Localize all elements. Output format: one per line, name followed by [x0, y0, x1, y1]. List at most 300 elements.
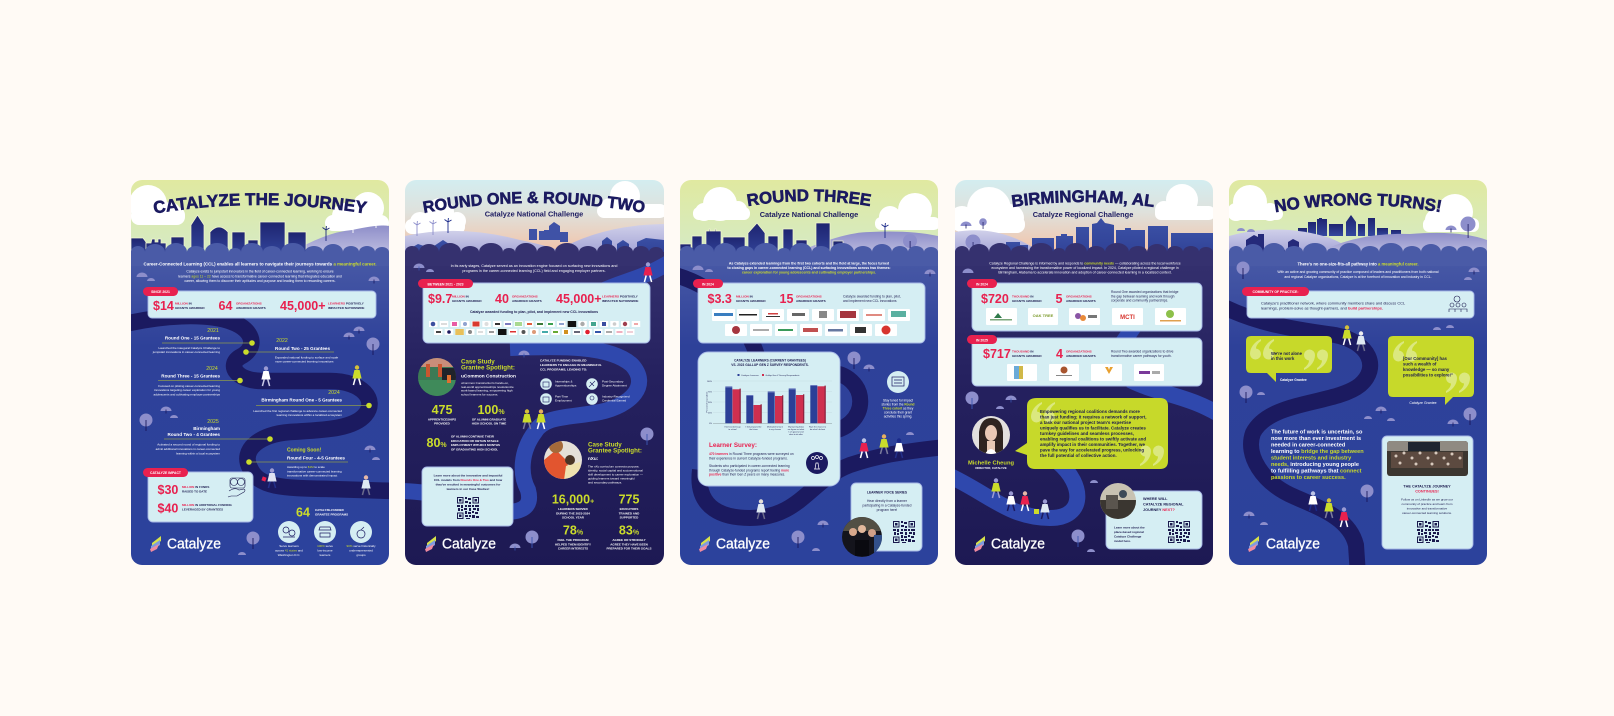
stats card: GRANTS AWARDED: [452, 299, 482, 303]
intro text: career, allowing them to discover their aptitudes and purpose and leading them to rewarding careers.: [184, 279, 336, 283]
stats card: ORGANIZATIONS: [512, 294, 538, 298]
stat icons: [278, 521, 372, 543]
stats card: and implement new CCL innovations: [843, 299, 897, 303]
logo: Catalyze: [716, 536, 770, 552]
learner survey text: positive than their Gen Z peers on many measures.: [709, 472, 785, 476]
case study 1 stats: EDUCATION OR OBTAIN STABLE: [451, 439, 499, 443]
logo: Catalyze: [1266, 536, 1320, 552]
title: NO WRONG TURNS!: [1274, 193, 1442, 212]
case study 1 photo: [418, 358, 456, 396]
case study 1 text: real-world apprenticeships revolutionize: [461, 385, 514, 389]
timeline 2025: learning within a local ecosystem: [176, 452, 220, 456]
impact card: MILLION IN FUNDS: [182, 485, 209, 489]
case study 1 stats: [426, 403, 506, 452]
2024 card: the gap between learning and work through: [1111, 294, 1175, 298]
subtitle: Catalyze National Challenge: [760, 210, 858, 219]
impact stories note: conclude their grant: [884, 410, 912, 414]
community of practice card: Catalyze's practitioner network, where community members share and discuss CCL: [1261, 300, 1406, 306]
intro text: [989, 262, 1181, 274]
impact card: $30: [158, 483, 178, 497]
bubble: our community: such a wealth of: [1403, 362, 1437, 366]
hills and turbines: [306, 226, 389, 252]
2024 card: $720: [981, 292, 1009, 306]
next card: JOURNEY NEXT?: [1143, 508, 1175, 512]
grantee stat: [296, 508, 348, 516]
case study 2 text: guiding learners toward meaningful: [588, 476, 635, 480]
next card: model here.: [1114, 539, 1131, 543]
bar chart: I am good at and: [788, 430, 804, 434]
timeline 2022: 2022: [276, 338, 288, 344]
title: ROUND THREE: [746, 189, 872, 206]
2024 card: IN 2024: [976, 282, 988, 286]
case study 2 text: Case Study: [588, 442, 622, 448]
case study 2 stats: PREPARED FOR THEIR GOALS: [607, 546, 651, 550]
stats card: AWARDED GRANTS: [512, 299, 542, 303]
grantee caption: Catalyze Grantee: [1409, 401, 1437, 405]
stats card: LEARNERS POSITIVELY: [328, 302, 364, 306]
case studies card: CCL models from Rounds One & Two and how: [434, 478, 503, 482]
stat captions: [275, 545, 376, 556]
bar chart: Percent of respondents: [706, 392, 708, 412]
stats card: MILLION IN: [452, 294, 469, 298]
community of practice card: learnings, problem-solve as thought-partners, and build partnerships.: [1261, 306, 1383, 310]
chart legend: Gallup Gen Z Survey Respondents: [766, 374, 800, 377]
figures on the road: [261, 365, 371, 495]
quote bubble: amplify impact in their communities. Together, we: [1040, 442, 1145, 447]
trees: [136, 272, 380, 555]
timeline coming soon: innovations with demonstrated impact: [287, 474, 337, 478]
continues card: [1382, 436, 1473, 549]
stats card: 45,000+: [556, 292, 602, 306]
quote bubble: pave the way for accelerated progress, unlocking: [1040, 448, 1144, 452]
bar chart: to school: [728, 428, 737, 431]
timeline 2024 Birmingham: 2024: [328, 390, 340, 396]
learner survey text: through Catalyze-funded programs report feeling more: [709, 468, 789, 472]
bar chart: the future: [749, 428, 759, 431]
group photo: [1387, 441, 1468, 476]
2025 card: Round Two awarded organizations to drive: [1111, 350, 1174, 354]
impact card: MILLION IN ADDITIONAL FUNDING: [182, 503, 232, 507]
case study 1 text: [461, 358, 516, 396]
bar chart: [706, 381, 832, 436]
trees: [414, 264, 654, 550]
grantee stat: 64: [296, 506, 310, 520]
next card: WHERE WILL: [1143, 497, 1168, 501]
learner voice card: LEARNER VOICE SERIES: [867, 490, 908, 494]
timeline 2024 Birmingham: Launched the first regional challenge to advance career-connected: [253, 409, 342, 413]
intro text: Career-Connected Learning (CCL) enables all learners to navigate their journeys towards a meaningful career.: [144, 262, 376, 266]
case study 2 stats: 83%: [619, 524, 640, 538]
turbines: [414, 218, 452, 236]
timeline 2022: Round Two - 25 Grantees: [275, 346, 330, 351]
timeline 2021: 2021: [207, 328, 219, 334]
intro text: There's no one-size-fits-all pathway into a meaningful career.: [1297, 262, 1419, 266]
outcomes list: Employment: [555, 398, 572, 402]
bar chart: Motivated to learn: [767, 426, 783, 428]
main statement: The future of work is uncertain, so: [1271, 430, 1363, 436]
case study 1 stats: 80%: [426, 436, 447, 450]
case study 2 stats: SCHOOL YEAR: [562, 516, 585, 520]
figures: [522, 409, 546, 429]
bubble: not alone: [1246, 336, 1332, 382]
bar chart: 100%: [707, 381, 712, 383]
outcomes list: LEARNERS TO ENGAGE IN MEANINGFUL: [540, 363, 602, 367]
case study 2 stats: SUPPORTED: [620, 516, 639, 520]
bar chart: in my classes: [769, 429, 781, 431]
intro text: [451, 264, 617, 273]
outcomes list: Internships &: [555, 380, 573, 384]
next card: Learn more about the: [1114, 526, 1145, 530]
case study 1 stats: EMPLOYMENT WITHIN 6 MONTHS: [451, 443, 500, 447]
bar chart: 25%: [708, 412, 712, 414]
chart card: [698, 352, 840, 486]
timeline coming soon: transformative career-connected learning: [287, 469, 342, 473]
intro text: ecosystem and harnessing the transformative power of localized impact. In 2024, Catalyze piloted a regional challenge in: [991, 266, 1179, 270]
learner survey text: 470 learners in Round Three programs were surveyed on: [709, 452, 794, 456]
outcomes list: Credential Earned: [602, 398, 627, 402]
stats card: BETWEEN 2021 - 2023: [428, 282, 464, 286]
intro text: Birmingham, Alabama to accelerate innovation and adoption of career-connected learning in a localized context.: [998, 270, 1172, 274]
case studies card: [422, 467, 513, 526]
skyline: [131, 214, 306, 252]
timeline 2025: Round Two - 4 Grantees: [168, 432, 220, 437]
learner survey text: [709, 442, 794, 476]
quote bubble: than just funding; it requires a network of support,: [1040, 414, 1146, 420]
case study 2 photo: [544, 439, 582, 480]
stats card: AWARDED GRANTS: [236, 306, 266, 310]
portrait caption: DIRECTOR, CATALYZE: [975, 466, 1007, 470]
bar chart: I feel excited to go: [724, 426, 742, 428]
bar chart: what to do after: [789, 433, 803, 436]
main statement: passions to career success.: [1271, 475, 1346, 481]
timeline 2022: more career-connected learning innovations: [275, 360, 334, 364]
case study 2 text: identity, social capital and socioemotional: [588, 468, 643, 472]
timeline 2021: Round One - 15 Grantees: [165, 336, 220, 340]
panel: Birmingham, AL: [955, 180, 1213, 565]
bar chart: 0%: [709, 423, 712, 425]
grantee logos: OAK TREE: [1033, 313, 1054, 318]
intro text: programs in the career-connected learning (CCL) field and engaging employer partners.: [462, 269, 606, 273]
impact card: $40: [158, 502, 178, 516]
timeline 2025: [156, 419, 273, 456]
body: [680, 252, 938, 566]
outcomes list: CCL PROGRAMS, LEADING TO:: [540, 368, 587, 372]
grantee stat: GRANTEE PROGRAMS: [315, 512, 348, 516]
continues card: THE CATALYZE JOURNEY: [1403, 484, 1451, 488]
case studies card: learners in our Case Studies!: [447, 487, 489, 491]
stats card: [693, 279, 925, 343]
clouds: [949, 184, 1215, 233]
stats card: GRANTS AWARDED: [736, 299, 766, 303]
case studies card: they've resulted in meaningful outcomes for: [436, 482, 501, 486]
case study 1 stats: APPRENTICESHIPS: [428, 418, 456, 422]
learner voice card: Hear directly from a learner: [867, 499, 908, 503]
intro text: With an active and growing community of practice composed of leaders and practitioners from both national: [1277, 270, 1439, 274]
next card: Catalyze Challenge: [1114, 534, 1142, 538]
intro text: learners ages 11 – 22 have access to transformative career-connected learning that integrates education and: [178, 274, 342, 278]
hills: [1229, 229, 1487, 260]
case study 2 stats: AGREE THEY HAVE BEEN: [610, 542, 648, 546]
body: [405, 252, 664, 566]
intro text: [727, 262, 891, 274]
grantee logos: [986, 308, 1186, 325]
trees: [962, 268, 1098, 552]
case study 2 text: and secondary pathways.: [588, 480, 622, 484]
main statement: now more than ever investment is: [1271, 436, 1361, 442]
stat captions: across 41 states and: [275, 548, 303, 552]
impact stories note: Stay tuned for impact: [883, 398, 913, 402]
photo: [1100, 483, 1136, 519]
grantee caption: Catalyze Grantee: [1280, 378, 1307, 382]
clouds: [693, 187, 940, 230]
2024 card: ORGANIZATIONS: [1066, 294, 1092, 298]
clouds: [129, 185, 389, 231]
skyline: [997, 218, 1213, 258]
stats card: 45,000+: [280, 299, 326, 313]
case study 1 stats: OF GRADUATING HIGH SCHOOL: [451, 448, 498, 452]
learner survey text: Learner Survey:: [709, 442, 757, 449]
main statement: learning to bridge the gap between: [1271, 449, 1364, 455]
case study 2 stats: FEEL THE PROGRAM: [558, 538, 589, 542]
portrait: [972, 416, 1010, 454]
bubble: not alone: in this work: [1271, 356, 1295, 361]
impact stories note: Three cohort as they: [883, 406, 914, 410]
stats card: ORGANIZATIONS: [236, 302, 262, 306]
community of practice card: COMMUNITY OF PRACTICE:: [1253, 290, 1298, 294]
outcomes list: Post-Secondary: [602, 380, 624, 384]
impact stories note: activities this spring.: [884, 414, 912, 418]
skyline: [680, 223, 843, 260]
bubble: our community: knowledge — so many: [1403, 367, 1450, 372]
case study 2 stats: TRAINED AND: [619, 511, 640, 515]
road: [125, 316, 395, 491]
next card: [1106, 491, 1202, 549]
timeline 2024 round three: 2024: [206, 366, 218, 372]
timeline coming soon: [246, 448, 348, 478]
figures: [1342, 325, 1366, 351]
title: ROUND ONE & ROUND TWO: [422, 192, 645, 213]
stats card: $3.3: [708, 292, 732, 306]
stat captions: underrepresented: [349, 548, 373, 552]
main statement: to fulfilling pathways that connect: [1271, 468, 1362, 474]
stats card: 40: [495, 292, 509, 306]
case study 1 text: uCommon Construction's hands-on,: [461, 381, 509, 385]
stats card: AWARDED GRANTS: [796, 299, 826, 303]
2025 card: GRANTS AWARDED: [1012, 354, 1042, 358]
impact card: CATALYZE IMPACT: [150, 471, 182, 475]
community of practice card: [1242, 287, 1474, 318]
bubble: our community: [1388, 336, 1474, 405]
icon: community: [1449, 296, 1467, 312]
quote bubble: turnkey guidelines and seamless processes,: [1040, 431, 1134, 436]
stats card: [143, 287, 376, 318]
timeline 2022: Expanded national funding to surface and scale: [275, 356, 339, 360]
case study 2 text: skill development to career exploration —: [588, 472, 643, 476]
case study 1 text: Case Study: [461, 358, 495, 366]
stat captions: learners: [320, 553, 331, 557]
timeline 2024 round three: innovations targeting career exploration for young: [154, 388, 220, 392]
timeline 2025: 2025: [207, 419, 219, 425]
intro text: career exploration for young adolescents and cultivating employer partnerships.: [742, 270, 876, 274]
continues card: career-connected learning solutions.: [1402, 511, 1452, 515]
hills and turbines: [785, 211, 938, 260]
stats card: GRANTS AWARDED: [175, 306, 205, 310]
panel: Round One and Round Two: [405, 180, 664, 565]
case studies card: Learn more about the innovative and impactful: [434, 474, 503, 478]
portrait caption: Michelle Cheung: [968, 460, 1014, 466]
quote bubble: uniquely qualifies us to facilitate. Catalyze creates: [1040, 426, 1146, 430]
far skyline: [529, 222, 568, 242]
2025 card: THOUSAND IN: [1012, 350, 1033, 354]
continues card: community of practice and learn from: [1402, 502, 1453, 506]
bar chart: I feel prepared for: [746, 426, 762, 428]
outcomes list: Industry-Recognized: [602, 394, 630, 398]
timeline 2024 round three: Focused on piloting career-connected learning: [158, 384, 220, 388]
road: [400, 262, 670, 512]
impact card: LEVERAGED BY GRANTEES: [182, 508, 223, 512]
timeline 2024 round three: Round Three - 15 Grantees: [161, 374, 220, 378]
timeline 2024 Birmingham: learning innovations within a localized ecosystem: [277, 413, 342, 417]
stats card: $14: [153, 299, 174, 313]
bar chart: do what I do best: [810, 428, 826, 431]
case study 2 stats: EDUCATORS: [620, 507, 638, 511]
hills: [405, 224, 664, 252]
bar chart: me figure out what: [788, 428, 805, 431]
impact card: RAISED TO DATE: [182, 490, 207, 494]
stats card: [418, 279, 650, 343]
body: [131, 252, 389, 566]
case study 2 stats: AGREE OR STRONGLY: [612, 538, 646, 542]
case study 1 text: Grantee Spotlight:: [461, 364, 515, 372]
stat captions: Washington D.C.: [278, 553, 300, 557]
quote bubble: [1015, 398, 1168, 469]
timeline coming soon: Coming Soon!: [287, 448, 321, 454]
stats card: MILLION IN: [736, 294, 753, 298]
trees: [692, 266, 936, 551]
learner voice card: [851, 483, 922, 551]
bubble: our community: [Our Community] has: [1403, 356, 1448, 361]
2025 card: transformative career pathways for youth.: [1111, 354, 1172, 358]
road: [1222, 306, 1370, 575]
timeline coming soon: Round Four - 4-5 Grantees: [287, 456, 345, 460]
stats card: IMPACTED NATIONWIDE: [602, 299, 638, 303]
title: CATALYZE THE JOURNEY: [154, 193, 368, 214]
timeline 2025: Activated a second round of regional funding to: [157, 442, 220, 446]
case study 2 stats: HELPED THEM IDENTIFY: [555, 542, 591, 546]
case study 2 stats: [552, 492, 651, 550]
chart title: VS. 2023 GALLUP GEN Z SURVEY RESPONDENTS.: [731, 363, 809, 367]
bubble: not alone: We're not alone: [1271, 351, 1303, 356]
timeline 2024 Birmingham: [253, 390, 372, 417]
timeline 2021: jumpstart innovations in career-connected learning: [152, 350, 220, 354]
intro text: [1277, 262, 1439, 279]
stats card: SINCE 2021: [151, 290, 170, 294]
2024 card: 5: [1056, 292, 1062, 306]
case study 1 stats: 475: [432, 403, 452, 417]
panel: Round Three: [680, 180, 938, 565]
case study 2 stats: DURING THE 2023-2024: [556, 511, 590, 515]
timeline 2022: [243, 338, 339, 364]
bar chart: 50%: [708, 402, 712, 404]
logo: Catalyze: [167, 536, 221, 552]
2024 card: AWARDED GRANTS: [1066, 299, 1096, 303]
figure: [643, 262, 653, 282]
case study 1 text: work-based learning, empowering high: [461, 389, 513, 393]
quote bubble: enabling regional coalitions to swiftly activate and: [1040, 436, 1146, 442]
case study 2 text: The nXu curriculum connects purpose,: [588, 464, 640, 468]
continues card: Follow us on LinkedIn as we grow our: [1401, 498, 1453, 502]
grantee logo strip: [429, 321, 640, 335]
stat captions: 100% serve: [317, 544, 333, 548]
subtitle: Catalyze Regional Challenge: [1033, 210, 1133, 219]
figures: [991, 478, 1050, 519]
clouds: [1227, 185, 1479, 232]
2024 card: [967, 279, 1202, 331]
grantee logos: MCTI: [1120, 315, 1135, 321]
intro text: As Catalyze extended learnings from the first two cohorts and the field at large, the focus turned: [729, 262, 889, 266]
case study 1 text: school learners for success.: [461, 392, 498, 396]
logo: Catalyze: [991, 536, 1045, 552]
stats card: 64: [218, 299, 232, 313]
timeline 2024 round three: [153, 366, 243, 396]
icon: hand with coins: [228, 478, 245, 497]
2024 card: corporate and community partnerships.: [1111, 299, 1168, 303]
outcomes list: Apprenticeships: [555, 384, 577, 388]
timeline 2025: admit additional innovations in career-connected: [156, 447, 220, 451]
stats card: Catalyze awarded funding to plan, pilot, and implement new CCL innovations: [470, 310, 598, 314]
2024 card: GRANTS AWARDED: [1012, 299, 1042, 303]
case study 2 text: [588, 442, 643, 484]
case study 1 stats: OF ALUMNI CONTINUE THEIR: [451, 434, 495, 438]
case study 1 stats: PROVIDED: [434, 422, 451, 426]
stats card: $9.7: [428, 292, 452, 306]
title: BIRMINGHAM, AL: [1012, 190, 1154, 208]
main statement: needed in career-connected: [1271, 442, 1346, 448]
outcomes list: CATALYZE FUNDING ENABLED: [540, 358, 587, 362]
stats card: LEARNERS POSITIVELY: [602, 294, 638, 298]
outcomes list: Degree Attainment: [602, 384, 627, 388]
intro text: In its early stages, Catalyze served as an innovation engine focused on surfacing new innovations and: [451, 264, 617, 268]
stats card: IN 2024: [702, 282, 714, 286]
quote bubble: a task our national project team's expertise: [1040, 420, 1132, 425]
timeline 2021: Launched the inaugural Catalyze Challenge to: [158, 346, 220, 350]
2025 card: ORGANIZATIONS: [1066, 350, 1092, 354]
stat captions: Serve learners: [279, 544, 299, 548]
outcomes list: [540, 358, 630, 405]
icon: learners: [806, 452, 828, 474]
case study 2 stats: 16,000+: [552, 492, 594, 506]
far skyline: [1298, 215, 1401, 236]
2024 card: THOUSAND IN: [1012, 294, 1033, 298]
chart legend: Catalyze Learners: [741, 374, 760, 377]
quote bubble: the full potential of collective action.: [1040, 453, 1117, 458]
road: [675, 275, 945, 518]
bar chart: My learning helps: [788, 426, 804, 428]
grantee stat: CATALYZE-FUNDED: [315, 508, 345, 512]
intro text: and regional Catalyze organizations, Catalyze is at the forefront of innovation and industry in CCL.: [1284, 275, 1432, 279]
grantee logos: [712, 309, 910, 336]
hill buildings and trees: [1237, 216, 1476, 258]
continues card: innovative and transformative: [1407, 506, 1447, 510]
learner survey text: Students who participated in career-connected learning: [709, 464, 790, 468]
chart legend: [738, 374, 800, 377]
panel: No Wrong Turns: [1229, 180, 1487, 565]
hill and trees: [955, 218, 1040, 258]
2025 card: IN 2025: [976, 338, 988, 342]
intro text: Catalyze exists to jumpstart innovators in the field of career-connected learning, working to ensure: [186, 270, 334, 274]
main statement: needs, introducing young people: [1271, 462, 1359, 468]
case study 2 stats: 78%: [563, 524, 584, 538]
